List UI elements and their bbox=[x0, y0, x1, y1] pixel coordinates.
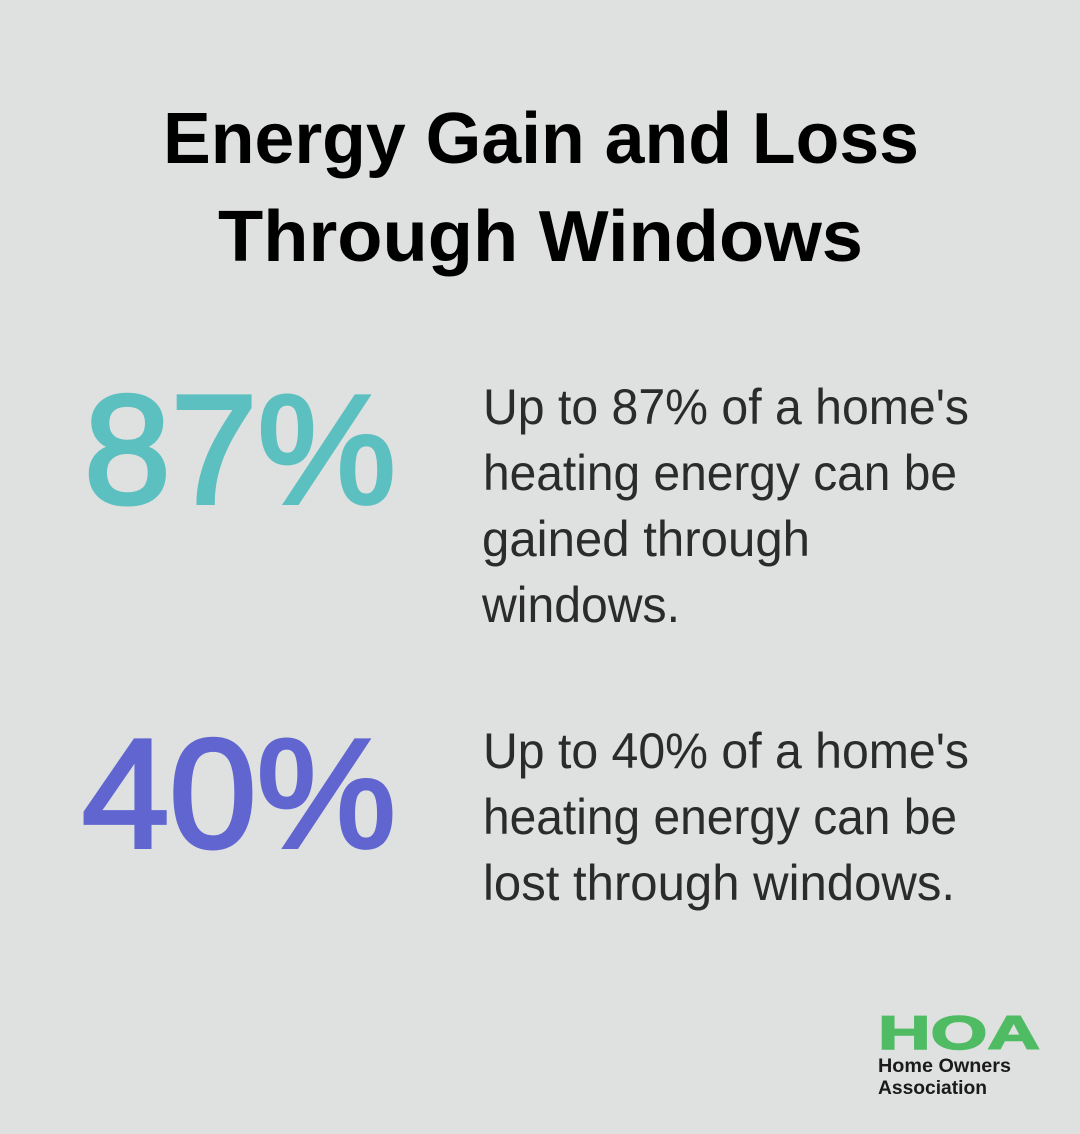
logo wordmark bbox=[878, 1056, 1011, 1099]
logo wordmark: Association bbox=[878, 1078, 987, 1099]
stat: 87% gained bbox=[84, 363, 969, 633]
title: Energy Gain and Loss bbox=[163, 99, 919, 179]
stat number 87%: 87% bbox=[84, 363, 396, 536]
logo wordmark: Home Owners bbox=[878, 1056, 1011, 1077]
stat description: gained: windows. bbox=[481, 577, 680, 633]
stat description: gained: gained through bbox=[482, 511, 810, 567]
stat description: gained: heating energy can be bbox=[483, 445, 957, 501]
stat description: gained bbox=[481, 379, 969, 633]
title bbox=[163, 99, 919, 277]
stat description: lost: lost through windows. bbox=[483, 855, 955, 911]
stat description: lost bbox=[483, 723, 969, 911]
stat description: lost: Up to 40% of a home's bbox=[483, 723, 969, 779]
stat number 40%: 40% bbox=[82, 707, 396, 880]
logo: Home Owners Association bbox=[878, 1006, 1040, 1099]
stat description: gained: Up to 87% of a home's bbox=[483, 379, 969, 435]
logo mark HOA: HOA bbox=[878, 1006, 1040, 1059]
stat description: lost: heating energy can be bbox=[483, 789, 957, 845]
stat: 40% lost bbox=[82, 707, 969, 911]
title: Through Windows bbox=[218, 197, 863, 277]
